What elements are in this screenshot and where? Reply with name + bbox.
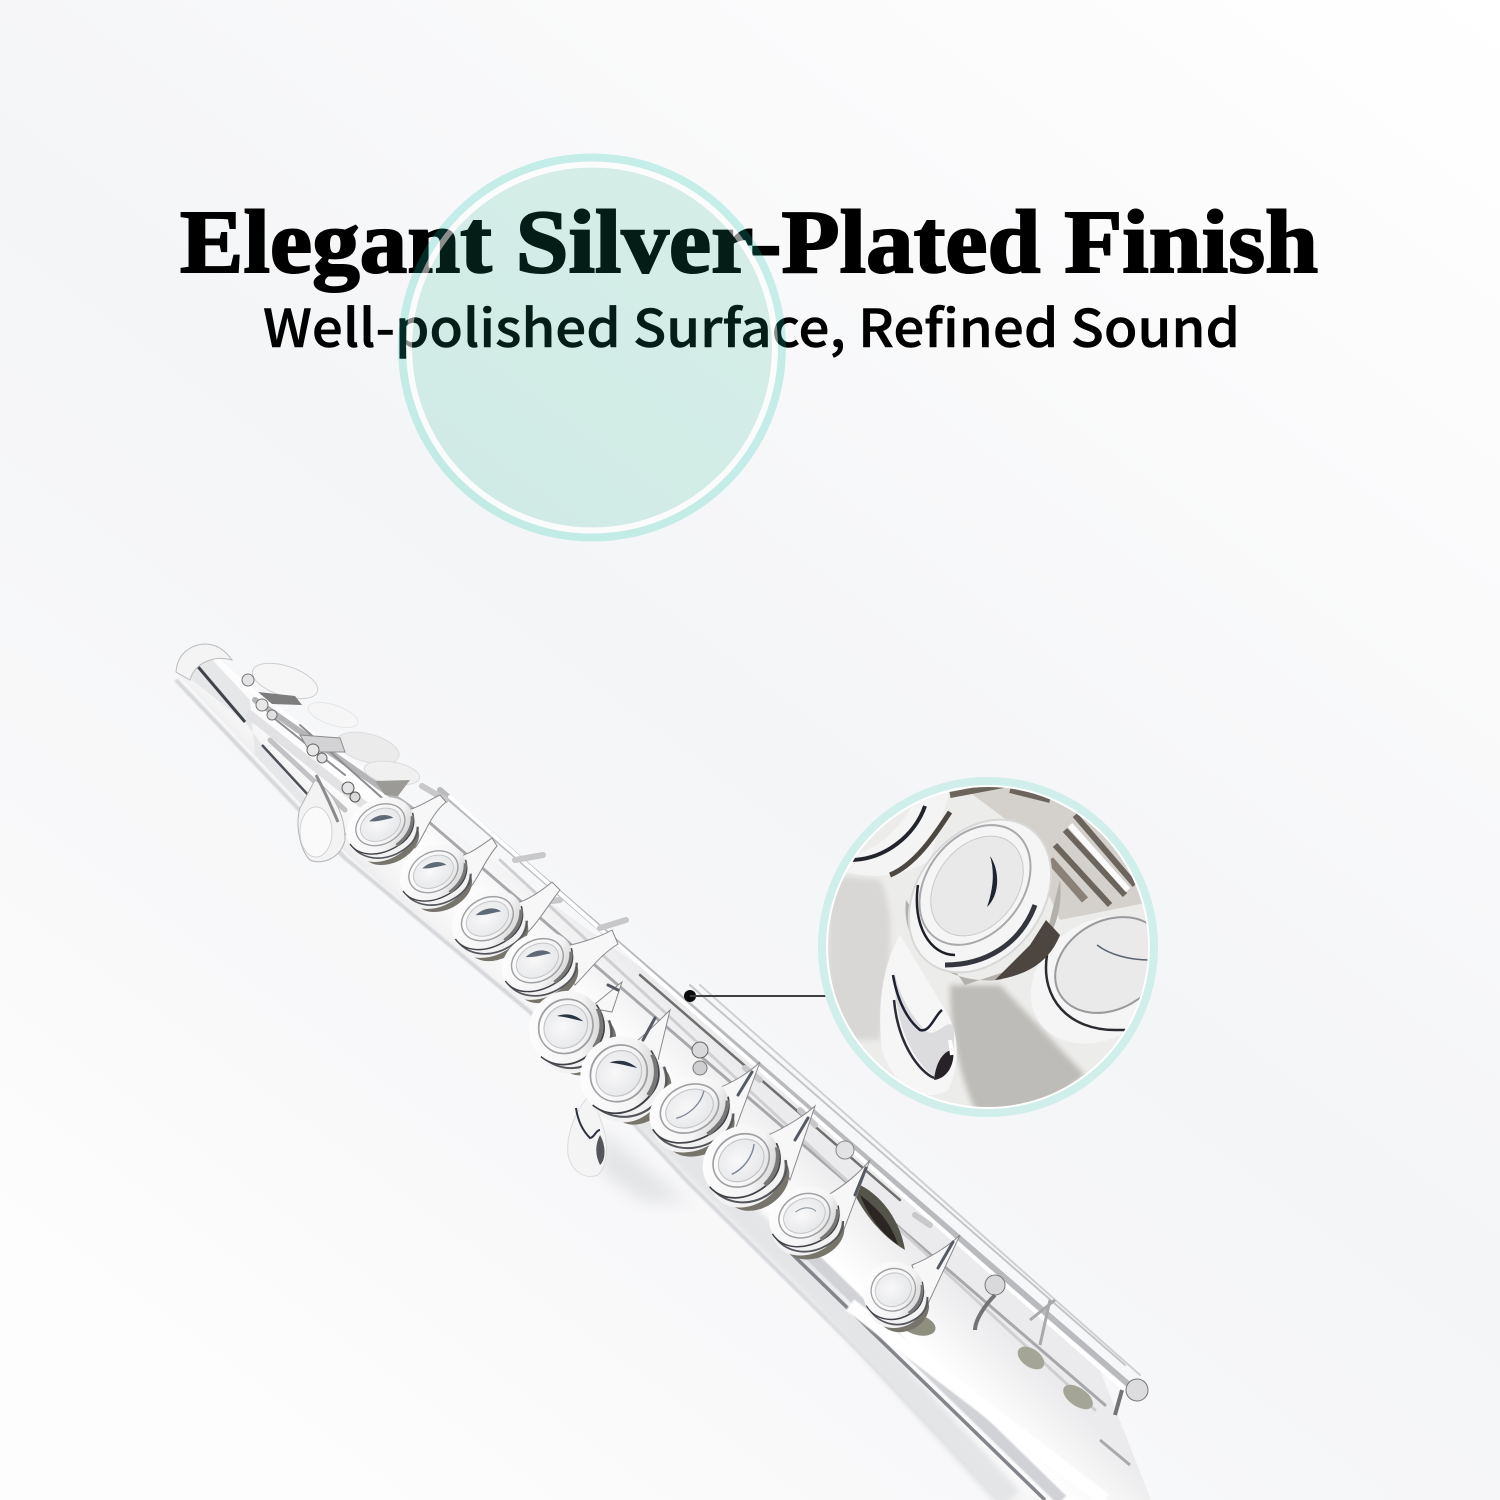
- magnified detail circle: [818, 777, 1158, 1117]
- soft shadow under flute: [600, 1130, 690, 1205]
- rods: [250, 700, 1140, 1410]
- key 7: [637, 1064, 746, 1171]
- key 5: [513, 975, 631, 1094]
- title: Elegant Silver-Plated Finish: [180, 193, 1318, 292]
- tube reflections: [176, 662, 1105, 1500]
- key 1: [336, 786, 429, 878]
- flute: [176, 644, 1151, 1500]
- detail main key: [906, 818, 1061, 985]
- detail upper left key: [847, 792, 949, 876]
- open-hole finger keys: [336, 786, 939, 1343]
- head keys: [242, 656, 421, 802]
- detail mechanism: [965, 787, 1142, 920]
- detail right key: [995, 916, 1148, 1044]
- key 10: [852, 1252, 939, 1343]
- head joint ring: [176, 644, 232, 680]
- tone holes: [848, 1180, 1097, 1414]
- key 8: [687, 1111, 803, 1228]
- key 2: [389, 833, 482, 925]
- key spurs: [395, 795, 960, 1310]
- detail photo: [828, 787, 1148, 1107]
- detail ring: [822, 781, 1154, 1113]
- callout leader line: [684, 990, 827, 1002]
- spur reflections: [608, 985, 953, 1268]
- key 4: [490, 920, 589, 1017]
- decorative teal circle: [402, 158, 782, 538]
- rod posts: [422, 786, 930, 1225]
- key 9: [758, 1175, 855, 1272]
- trill balls and rear mechanism: [692, 1042, 1148, 1465]
- key 3: [440, 878, 539, 975]
- flute tube: [176, 645, 1151, 1500]
- spatula lever: [568, 1095, 606, 1176]
- head joint shading: [182, 652, 345, 850]
- thumb key: [298, 775, 345, 862]
- subtitle: Well-polished Surface, Refined Sound: [263, 287, 1240, 362]
- key 6: [563, 1020, 687, 1143]
- detail spatula lever: [880, 935, 957, 1095]
